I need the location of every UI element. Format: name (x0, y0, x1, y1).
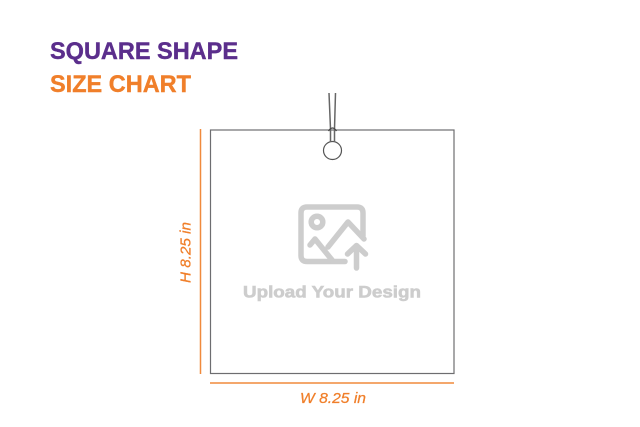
title: size chart: SIZE CHART (50, 71, 191, 98)
title: square shape: SQUARE SHAPE (50, 38, 238, 65)
upload label: Upload Your Design (243, 284, 421, 302)
square product outline (210, 130, 454, 374)
hanging string and hole (324, 93, 342, 160)
icon: upload image (301, 207, 366, 268)
height dimension line (200, 129, 202, 374)
height label: H 8.25 in (178, 222, 194, 283)
width dimension line (210, 382, 454, 384)
width label: W 8.25 in (300, 390, 366, 407)
